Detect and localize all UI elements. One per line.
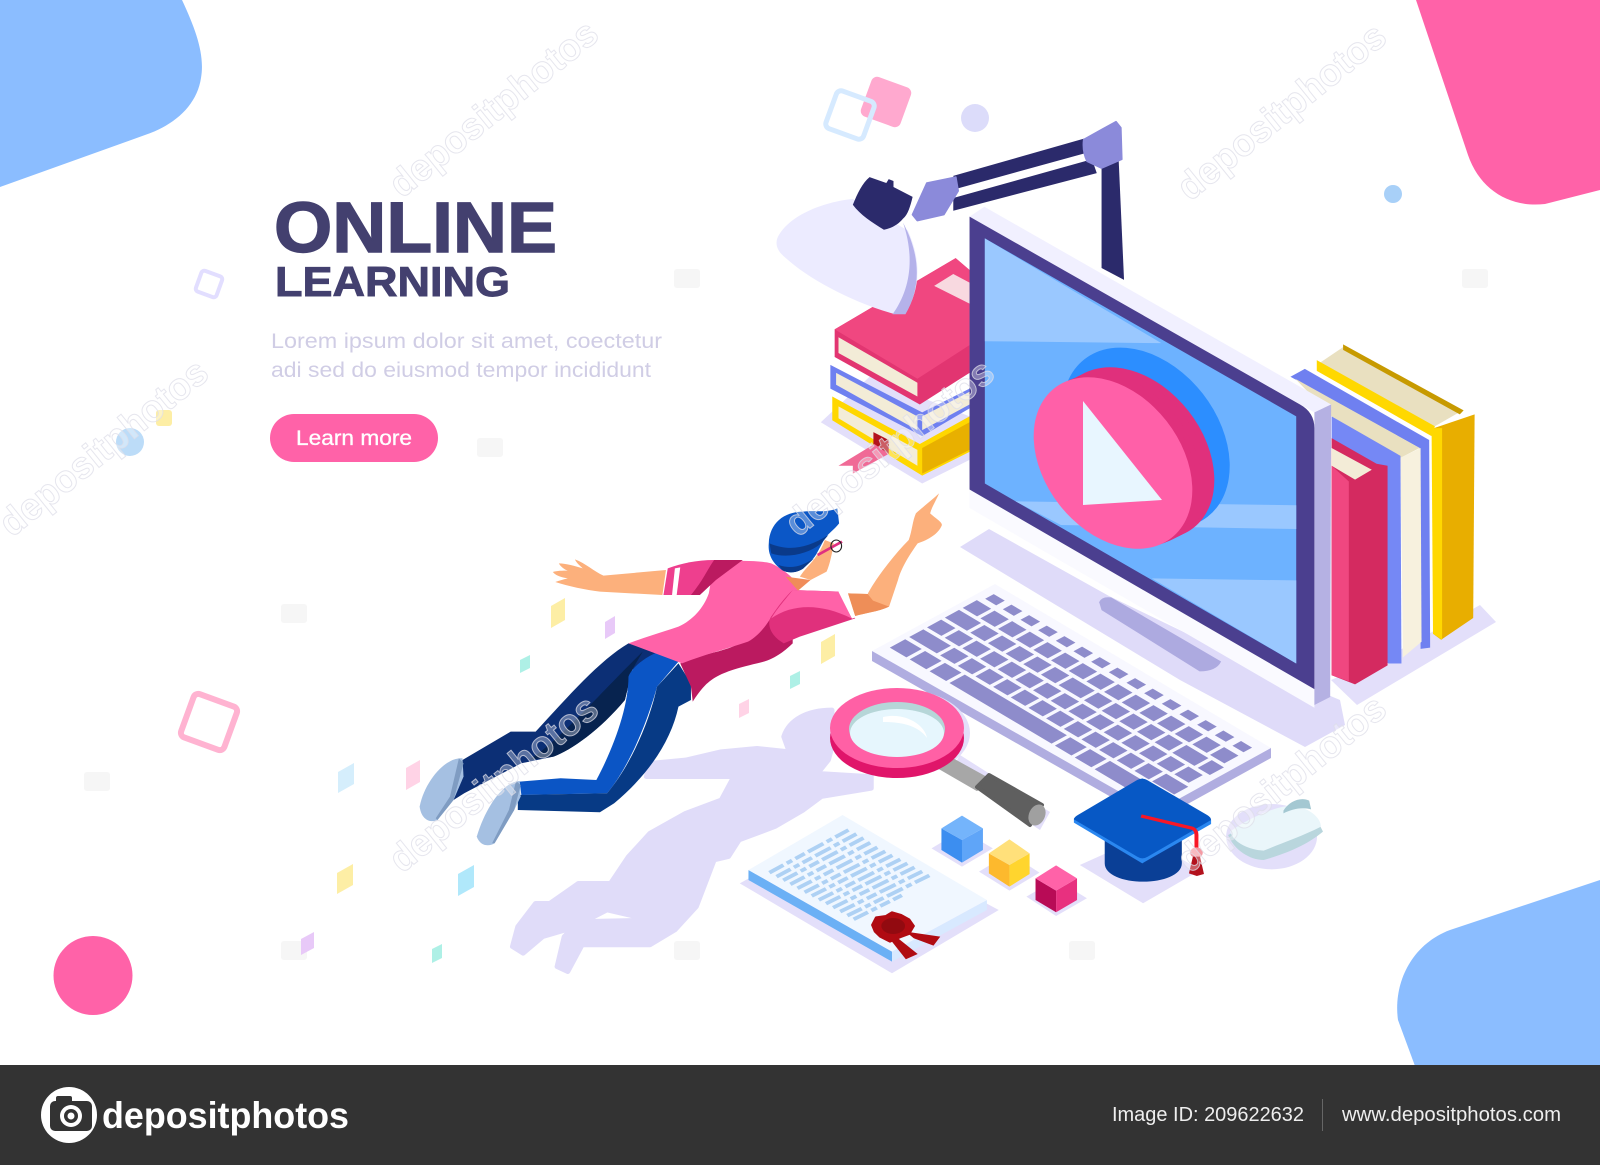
lamp pole xyxy=(1102,151,1124,280)
lamp arms xyxy=(953,138,1097,211)
desk lamp and left book stack xyxy=(777,122,1124,484)
decorative floating shapes xyxy=(116,75,1402,963)
wax seal xyxy=(872,912,940,959)
torso xyxy=(628,561,800,663)
shoes xyxy=(420,758,521,845)
bookmark ribbon xyxy=(838,444,889,474)
cube shadows xyxy=(932,830,1087,916)
monitor top edge xyxy=(970,207,1331,412)
cube: yellow xyxy=(989,839,1030,887)
watermark: depositphotos xyxy=(777,351,1003,545)
front leg xyxy=(518,652,691,812)
flying student xyxy=(420,493,942,845)
watermark: depositphotos xyxy=(1169,15,1395,209)
button: learn more: Learn more xyxy=(296,427,412,450)
footer bar xyxy=(0,1065,1600,1165)
watermark: depositphotos xyxy=(381,12,607,206)
shadow: right books xyxy=(1331,605,1496,705)
text block: description xyxy=(271,329,662,382)
book: red upright xyxy=(1332,438,1388,684)
monitor bezel xyxy=(970,217,1314,689)
certificate xyxy=(740,815,999,973)
lamp joint lower xyxy=(913,177,958,221)
shadow: monitor xyxy=(960,529,1345,747)
computer mouse xyxy=(1226,799,1323,869)
cube: blue xyxy=(941,816,983,863)
play button xyxy=(1001,315,1264,580)
book: yellow xyxy=(832,397,970,476)
right arm shade xyxy=(848,593,889,616)
magnifying glass xyxy=(830,688,1050,830)
right books xyxy=(1290,344,1475,684)
monitor bottom edge xyxy=(970,489,1314,708)
logo icon: camera xyxy=(41,1087,97,1143)
blob: top right pink xyxy=(1416,0,1600,205)
watermark: depositphotos xyxy=(381,687,607,881)
graduation cap xyxy=(1074,778,1211,903)
monitor xyxy=(970,207,1331,708)
button: learn more xyxy=(270,414,438,462)
lamp head xyxy=(853,177,913,230)
logo wordmark: depositphotos xyxy=(102,1095,349,1136)
right arm xyxy=(848,493,942,616)
watermark: depositphotos xyxy=(1169,687,1395,881)
book: blue and cream upright xyxy=(1290,369,1430,663)
book: blue xyxy=(830,365,970,436)
right sleeve xyxy=(769,590,856,643)
cube: pink xyxy=(1036,865,1077,912)
left sleeve xyxy=(663,560,743,595)
lamp shade xyxy=(777,199,917,314)
heading: learning: LEARNING xyxy=(275,258,510,305)
keyboard xyxy=(872,584,1271,822)
lamp joint top xyxy=(1084,122,1122,168)
dark side of torso xyxy=(680,590,793,702)
text block: description: Lorem ipsum dolor sit amet, coectetur xyxy=(271,329,662,353)
monitor screen xyxy=(985,238,1296,663)
shadow: flying student xyxy=(512,710,871,972)
back leg xyxy=(454,643,659,800)
blob: bottom right blue xyxy=(1397,880,1600,1066)
divider xyxy=(1322,1099,1323,1131)
head xyxy=(769,508,842,591)
monitor side edge xyxy=(1314,404,1331,705)
book: yellow upright xyxy=(1317,344,1475,640)
book: red xyxy=(835,258,970,404)
website: www.depositphotos.com xyxy=(1341,1104,1561,1126)
monitor stand bar xyxy=(1099,597,1221,671)
circle: bottom left pink xyxy=(54,936,132,1015)
blob: top left blue xyxy=(0,0,202,187)
left arm xyxy=(553,559,666,595)
text block: description: adi sed do eiusmod tempor incididunt xyxy=(271,358,651,382)
shadow: left books xyxy=(821,377,970,484)
image id: Image ID: 209622632 xyxy=(1112,1104,1304,1126)
building blocks and graduation cap xyxy=(932,778,1323,916)
watermark xyxy=(0,12,1395,881)
heading: online: ONLINE xyxy=(274,189,557,268)
